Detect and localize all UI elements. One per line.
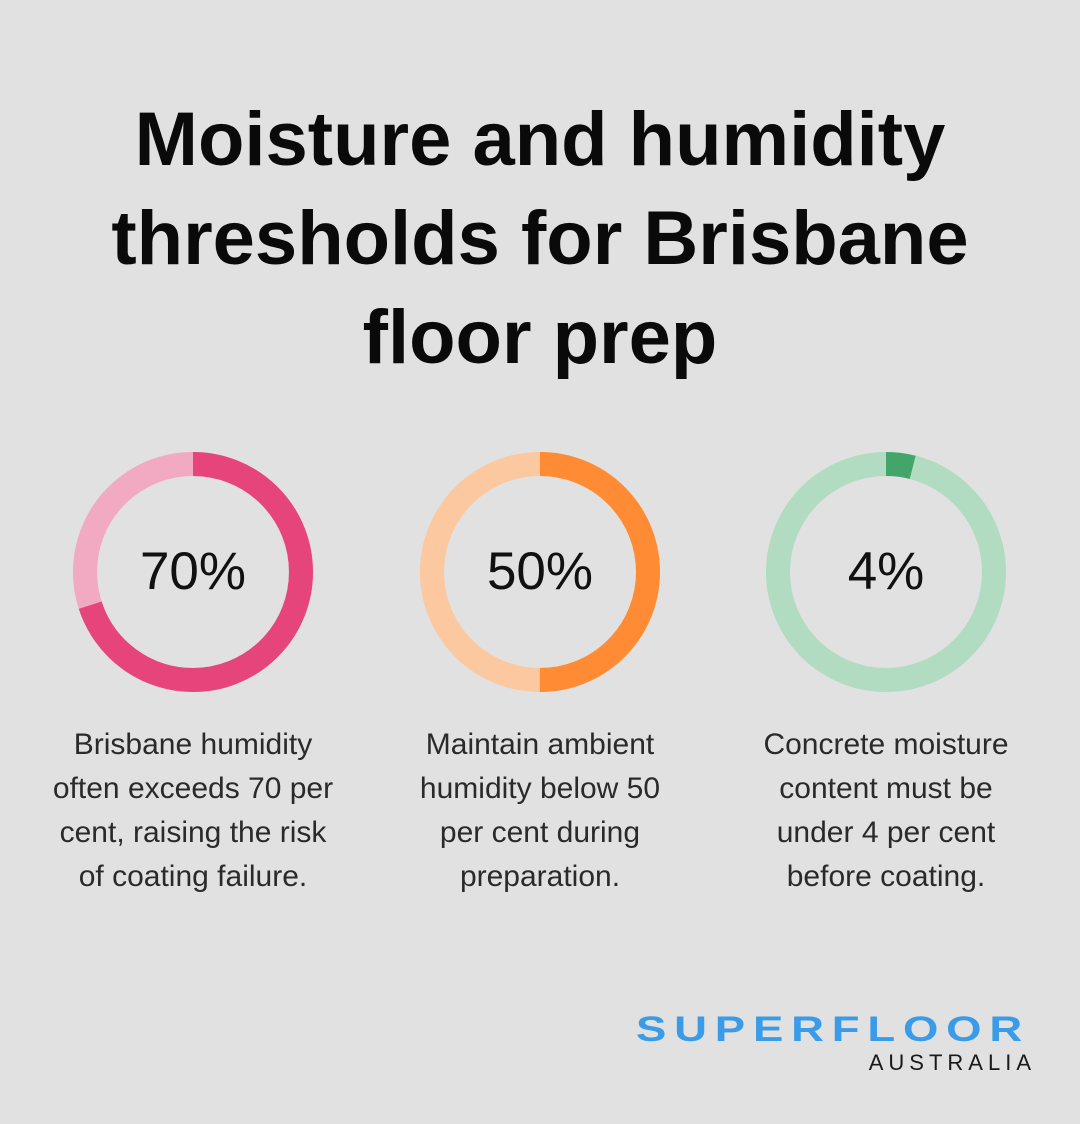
caption 2: Maintain ambient: [426, 728, 654, 761]
caption 2: per cent during: [440, 816, 640, 849]
donut: 4%: [766, 452, 1006, 692]
logo: SUPERFLOOR: [636, 1010, 1030, 1049]
title: floor prep: [363, 295, 717, 380]
caption 1: cent, raising the risk: [60, 816, 326, 849]
title: Moisture and humidity: [135, 97, 945, 182]
donut: 4%: 4%: [848, 542, 924, 601]
caption 1: often exceeds 70 per: [53, 772, 333, 805]
caption 1: [53, 728, 333, 893]
caption 3: before coating.: [787, 860, 985, 893]
caption 2: preparation.: [460, 860, 620, 893]
caption 3: content must be: [779, 772, 993, 805]
title: [111, 97, 969, 380]
caption 1: of coating failure.: [79, 860, 307, 893]
caption 3: Concrete moisture: [763, 728, 1009, 761]
donut: 70%: [73, 452, 313, 692]
title: thresholds for Brisbane: [111, 196, 969, 281]
caption 3: [763, 728, 1009, 893]
caption 1: Brisbane humidity: [74, 728, 312, 761]
donut: 50%: [420, 452, 660, 692]
donut: 70%: 70%: [140, 542, 246, 601]
caption 3: under 4 per cent: [777, 816, 995, 849]
logo: [636, 1010, 1036, 1075]
caption 2: [420, 728, 660, 893]
donut: 50%: 50%: [487, 542, 593, 601]
logo: AUSTRALIA: [869, 1050, 1036, 1075]
caption 2: humidity below 50: [420, 772, 660, 805]
